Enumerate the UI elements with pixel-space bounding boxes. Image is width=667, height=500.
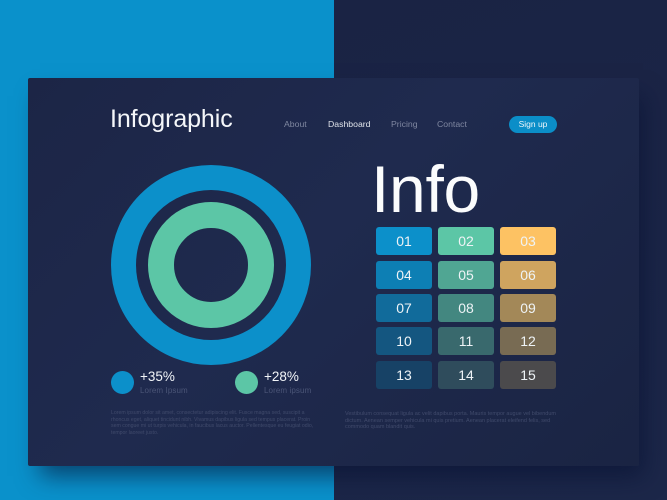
text block: right paragraph: Vestibulum consequat ligula ac velit dapibus porta. Mauris tempor augue vel bibendum: [345, 411, 556, 417]
nav: Pricing: Pricing: [391, 119, 418, 129]
background: navy right half: [334, 0, 667, 500]
legend: blue value: +35%: [140, 369, 175, 384]
card 07: [376, 294, 432, 322]
ring: green inner: [161, 215, 261, 315]
card 15: 15: [520, 367, 536, 383]
grid: numbered cards: [376, 227, 556, 389]
text block: right paragraph: [345, 411, 556, 430]
nav: Dashboard: Dashboard: [328, 119, 371, 129]
card 06: [500, 260, 556, 288]
title: Infographic: [110, 105, 233, 133]
nav: Contact: Contact: [437, 119, 467, 129]
card 15: [500, 361, 556, 389]
card 05: [438, 260, 494, 288]
card 11: 11: [459, 333, 473, 349]
chart: concentric rings: [111, 165, 311, 365]
panel: main card: [28, 78, 639, 466]
text block: left paragraph: sem congue mi ut turpis vehicula, in faucibus lacus auctor. Pellentesque eu feugiat odio,: [111, 423, 313, 429]
card 10: 10: [396, 333, 412, 349]
text block: left paragraph: Lorem ipsum dolor sit amet, consectetur adipiscing elit. Fusce magna sed, suscipit a: [111, 410, 304, 416]
card 14: 14: [458, 367, 474, 383]
card 02: 02: [458, 233, 474, 249]
background: blue left half: [0, 0, 334, 500]
legend: blue label: Lorem Ipsum: [140, 386, 188, 395]
card 05: 05: [458, 266, 474, 282]
card 14: [438, 361, 494, 389]
text block: right paragraph: dictum. Aenean semper vehicula mi quis pretium. Aenean placerat eleifend felis, sed: [345, 418, 550, 424]
card 10: [376, 327, 432, 355]
card 03: [500, 227, 556, 255]
card 01: [376, 227, 432, 255]
card 08: [438, 294, 494, 322]
card 01: 01: [396, 233, 412, 249]
card 08: 08: [458, 300, 474, 316]
text block: left paragraph: tempor laoreet justo.: [111, 430, 158, 436]
card 04: 04: [396, 266, 412, 282]
legend: green label: Lorem ipsum: [264, 386, 311, 395]
text block: right paragraph: commodo quam blandit quis.: [345, 424, 415, 430]
heading: Info: Info: [371, 152, 480, 226]
ring: blue outer: [124, 178, 298, 352]
legend: blue dot: [111, 371, 134, 394]
card 09: [500, 294, 556, 322]
text block: left paragraph: rhoncus eget, aliquet tincidunt nibh. Vivamus dapibus ligula sed tempus placerat. Proin: [111, 417, 310, 423]
legend: green dot: [235, 371, 258, 394]
button: sign up: [509, 116, 557, 133]
card 06: 06: [520, 266, 536, 282]
card 12: 12: [520, 333, 536, 349]
nav: About: About: [284, 119, 307, 129]
card 12: [500, 327, 556, 355]
card 09: 09: [520, 300, 536, 316]
text block: left paragraph: [111, 410, 313, 436]
card 13: [376, 361, 432, 389]
legend: green value: +28%: [264, 369, 299, 384]
card 13: 13: [396, 367, 412, 383]
card 11: [438, 327, 494, 355]
button: sign up: Sign up: [519, 119, 547, 129]
card 04: [376, 260, 432, 288]
card 03: 03: [520, 233, 536, 249]
card 07: 07: [396, 300, 412, 316]
card 02: [438, 227, 494, 255]
